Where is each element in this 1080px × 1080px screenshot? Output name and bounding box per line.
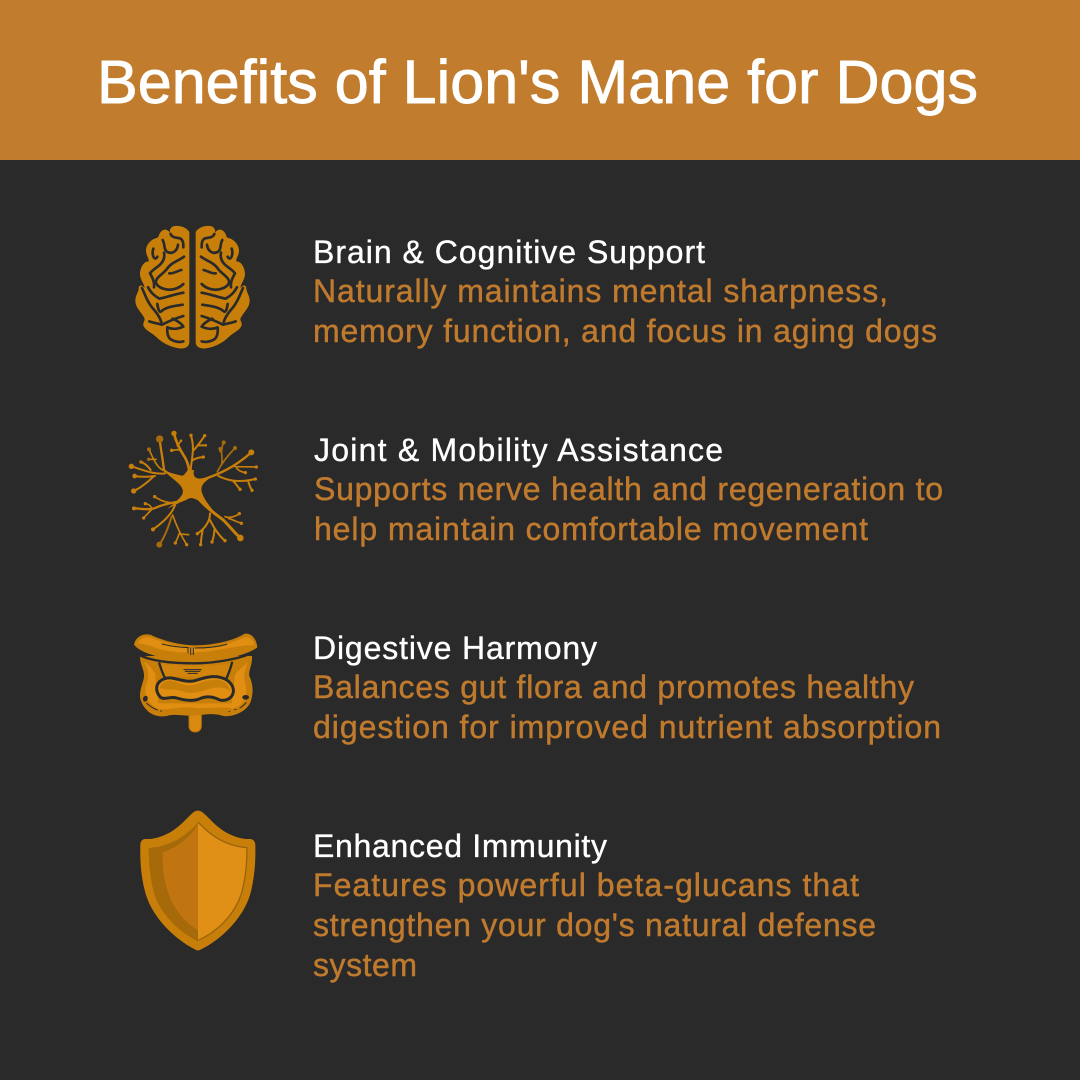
rectum stub (189, 713, 201, 732)
description: help maintain comfortable movement (314, 511, 868, 547)
description: strengthen your dog's natural defense (313, 907, 876, 943)
header banner (0, 0, 1080, 160)
heading: Joint & Mobility Assistance (314, 432, 723, 468)
description: system (313, 947, 417, 983)
description: Supports nerve health and regeneration to (314, 471, 943, 507)
description: memory function, and focus in aging dogs (313, 313, 937, 349)
icon: shield (140, 811, 255, 950)
description (313, 273, 937, 349)
panel: joint and mobility assistance (129, 431, 943, 548)
heading: Brain & Cognitive Support (313, 234, 705, 270)
description: Features powerful beta-glucans that (313, 867, 859, 903)
description (314, 471, 943, 547)
centre trapezoid (159, 663, 232, 677)
heading: Enhanced Immunity (313, 828, 607, 864)
transverse colon top (134, 634, 257, 661)
description: Naturally maintains mental sharpness, (313, 273, 888, 309)
panel: enhanced immunity (140, 811, 876, 983)
icon: intestines (134, 634, 257, 732)
panel: digestive harmony (134, 630, 941, 745)
icon: brain (135, 226, 250, 348)
description (313, 867, 876, 983)
heading: Digestive Harmony (313, 630, 597, 666)
description: Balances gut flora and promotes healthy (313, 669, 914, 705)
title: Benefits of Lion's Mane for Dogs (97, 48, 978, 116)
neuron body (167, 470, 218, 515)
inner loop (157, 677, 233, 700)
icon: neuron (129, 431, 258, 548)
panel: brain and cognitive support (135, 226, 937, 349)
colon frame (140, 656, 253, 716)
description: digestion for improved nutrient absorption (313, 709, 941, 745)
colon highlight (144, 662, 248, 709)
description (313, 669, 941, 745)
